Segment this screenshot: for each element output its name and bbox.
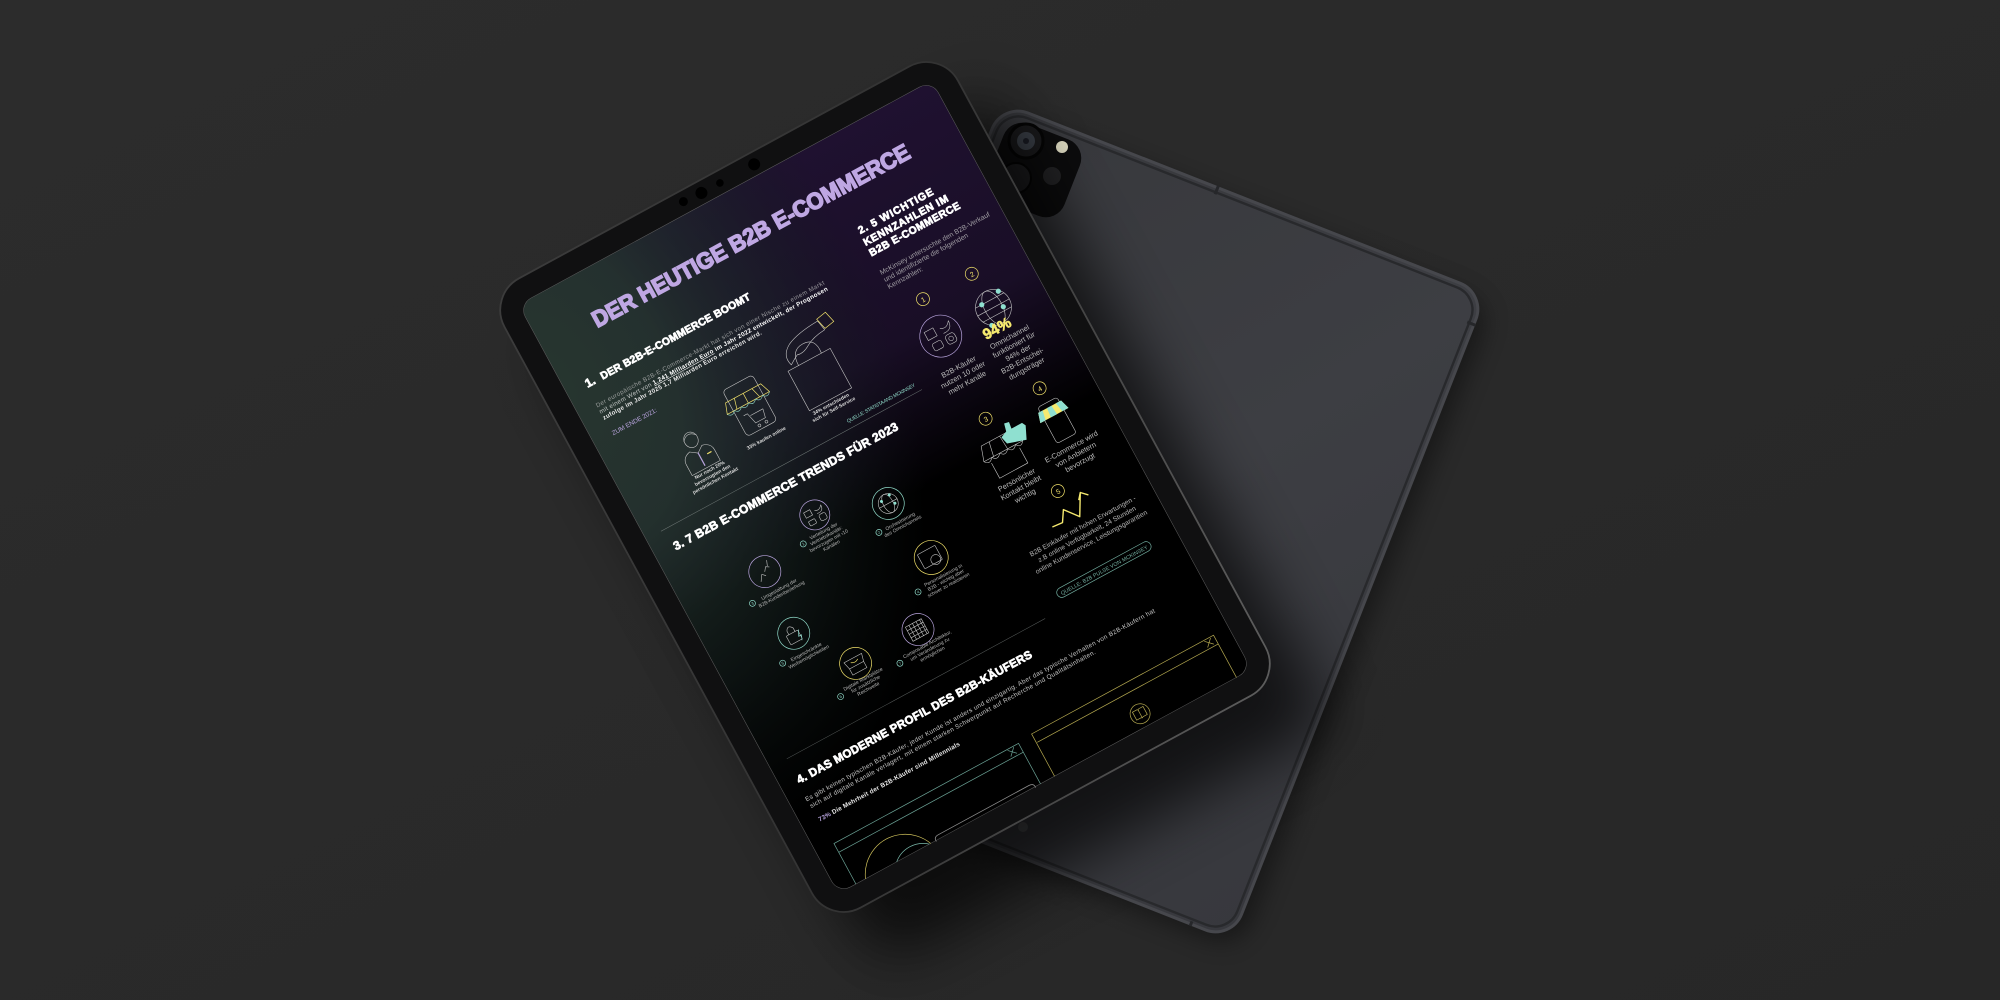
caption 1: nutzen 10 oder: [939, 359, 987, 390]
section 2 heading: B2B E-COMMERCE: [867, 200, 962, 259]
screen: [519, 80, 1251, 894]
caption 4: E-Commerce wird: [1043, 429, 1099, 465]
camera module: [981, 117, 1087, 223]
trend 6: Digitale Marktplätze: [843, 666, 884, 693]
caption 4: bevorzugt: [1064, 451, 1096, 474]
back tablet: [747, 101, 1494, 951]
caption 2: dungsträger: [1007, 355, 1047, 382]
card left: [834, 743, 1043, 888]
number 3: [978, 412, 992, 426]
number 2: [964, 266, 979, 281]
icon: globe: [975, 288, 1012, 328]
trend 4: [914, 540, 970, 598]
caption: bag: 34% entschieden: [812, 392, 850, 417]
trend 1: Vertriebskanäle:: [809, 525, 844, 548]
trend 6: für zusätzliche: [850, 674, 882, 695]
infographic content: [584, 142, 1237, 884]
section 2 body: Kennzahlen:: [887, 266, 924, 291]
icon: book: [1127, 700, 1154, 727]
caption 3: wichtig: [1012, 486, 1037, 506]
caption: phone shop: 33% kaufen online: [746, 425, 787, 452]
section 1 heading: 1.: [582, 373, 598, 390]
caption 1: mehr Kanäle: [947, 369, 988, 397]
icon: shopping bag and hand: [786, 312, 852, 412]
trend 4: 4: [916, 589, 921, 595]
icon: social channels: [919, 314, 962, 358]
section 1 body: Der europäische B2B-E-Commerce-Markt hat sich von einer Nische zu einem Markt: [595, 280, 826, 409]
trend 7: um Veränderung zu: [909, 637, 951, 663]
trend 1: bevorzugen mit ›10: [809, 528, 850, 554]
section 4 body: sich auf digitale Kanäle verlagert, mit einem starken Schwerpunkt auf Recherche und Qualitätsinhalten.: [809, 649, 1097, 810]
source pill: QUELLE: B2B PULSE VON MCKINSEY: [1060, 545, 1149, 597]
caption: person: Nur noch 20%: [694, 460, 726, 481]
trend 2: [872, 487, 922, 537]
stat 94%: 94%: [980, 314, 1014, 343]
caption: person: bevorzugten den: [694, 464, 732, 488]
section 2 body: McKinsey untersuchte den B2B-Verkauf: [879, 211, 991, 277]
trend 2: des Omnichannels: [883, 514, 923, 539]
trend 2: 2: [877, 529, 882, 535]
icon: phone shop: [724, 376, 776, 436]
section 2 body: und identifizierte die folgenden: [883, 232, 970, 284]
trend 4: schwer zu realisieren: [927, 572, 971, 599]
caption 3: Persönlicher: [996, 466, 1037, 494]
number 3: 3: [983, 416, 990, 424]
caption: bag: sich für Self-Service: [812, 396, 857, 424]
trend 5: [777, 616, 830, 668]
section 2 heading: KENNZAHLEN IM: [861, 193, 951, 249]
trend 1: Verteilung der: [809, 521, 839, 542]
section 3 heading: 3. 7 B2B E-COMMERCE TRENDS FÜR 2023: [670, 419, 901, 553]
source 1: QUELLE: STATISTA AND MCKINSEY: [846, 382, 917, 425]
caption 2: B2B-Entschei-: [999, 345, 1046, 376]
close mark: [1008, 747, 1017, 757]
icon: person: [684, 432, 721, 476]
caption 2: Omnichannel: [988, 322, 1031, 351]
home indicator: [934, 783, 1036, 841]
trend 7: [896, 613, 952, 667]
caption 2: funktioniert für: [991, 329, 1037, 360]
number 2: 2: [969, 271, 976, 279]
trend 7: ermöglichen: [919, 645, 946, 664]
caption 4: von Anbietern: [1054, 440, 1098, 469]
caption 5: online Kundenservice, Leistungsgarantien: [1034, 509, 1149, 576]
caption 3: Kontakt bleibt: [999, 473, 1043, 502]
section 1 body: mit einem Wert von 1.241 Milliarden Euro im Jahr 2022 entwickelt, der Prognosen: [598, 286, 829, 416]
icon: shop with thumb: [980, 422, 1028, 478]
trend 3: [748, 555, 805, 608]
stat line 73%: 73% Die Mehrheit der B2B-Käufer sind Millennials: [817, 741, 962, 823]
number 4: 4: [1037, 386, 1044, 394]
trend 4: B2B - wichtig aber: [927, 568, 966, 593]
card right: [1032, 635, 1239, 781]
caption 2: [990, 324, 1044, 380]
trend 5: Werbemöglichkeiten: [788, 644, 831, 671]
trend 1: 1: [801, 541, 806, 547]
title: DER HEUTIGE B2B E-COMMERCE: [587, 139, 914, 332]
caption 5: z.B online Verfügbarkeit, 24 Stunden: [1037, 505, 1138, 564]
trend 3: Umgestaltung der: [761, 578, 798, 602]
front cameras: [677, 156, 762, 210]
trend 6: 6: [838, 693, 843, 699]
trend 3: 3: [750, 600, 755, 606]
number 1: 1: [920, 296, 927, 304]
section 4 heading: 4. DAS MODERNE PROFIL DES B2B-KÄUFERS: [795, 648, 1035, 787]
trend 7: Composable Architektur,: [902, 629, 953, 660]
trend 5: Eingeschränkte: [790, 642, 823, 663]
icon: phone with awning: [1038, 398, 1076, 443]
trend 4: Personalisierung in: [923, 563, 964, 589]
icon: zigzag arrow: [1052, 492, 1089, 528]
trend 1: Kanälen: [822, 539, 841, 553]
trend 5: 5: [780, 660, 786, 666]
trend 1: [799, 500, 848, 552]
caption: person: persönlichen Kontakt: [692, 466, 740, 496]
label: zum Ende 2021: ZUM ENDE 2021:: [611, 407, 659, 437]
caption 2: 94% der: [1004, 342, 1033, 363]
arc chart: [851, 818, 964, 929]
connector dot: [1018, 822, 1028, 832]
front tablet shadow: [539, 92, 1335, 968]
caption 1: B2B-Käufer: [940, 354, 978, 380]
trend 7: 7: [898, 660, 903, 666]
section 1 heading: DER B2B-E-COMMERCE BOOMT: [598, 291, 753, 382]
trend 6: Reichweite: [856, 681, 881, 698]
caption 5: B2B Einkäufer mit hohen Erwartungen -: [1029, 495, 1137, 558]
section 1 body: zufolge im Jahr 2025 1,7 Milliarden Euro erreichen wird.: [602, 330, 763, 422]
trend 2: Orchestrierung: [885, 511, 917, 532]
front tablet: [499, 62, 1271, 913]
number 1: [916, 292, 930, 306]
section 2 heading: 2. 5 WICHTIGE: [856, 186, 936, 237]
trend 3: B2B-Kundenbeziehung: [758, 580, 806, 610]
number 5: 5: [1055, 488, 1062, 496]
number 4: [1032, 381, 1046, 396]
trend 6: [837, 647, 882, 700]
number 5: [1051, 484, 1065, 498]
section 4 body: Es gibt keinen typischen B2B-Käufer, jeder Kunde ist anders und einzigartig. Aber das typische Verhalten von B2B-Käufern hat: [804, 608, 1157, 803]
